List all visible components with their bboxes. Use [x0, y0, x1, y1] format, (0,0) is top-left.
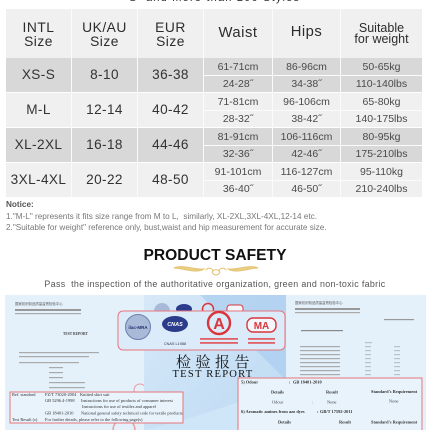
callout: certification logos: CNAS — [167, 322, 183, 328]
icon: gold ornament — [174, 266, 258, 276]
row XS-S — [22, 60, 407, 90]
row 3XL-4XL: 3XL-4XL — [11, 172, 66, 187]
row M-L: 65-80kg — [363, 96, 400, 108]
row XS-S: 8-10 — [90, 67, 119, 82]
left document page — [5, 295, 146, 430]
heading: product safety: PRODUCT SAFETY — [144, 247, 286, 264]
row XL-2XL: 16-18 — [86, 137, 123, 152]
header: Waist: Waist — [219, 24, 257, 40]
notice text: Notice: — [6, 200, 34, 209]
center document cover: TEST REPORT — [173, 369, 253, 380]
row 3XL-4XL — [11, 166, 408, 194]
right document page — [286, 295, 425, 430]
callout: odour and aromatic amines box: Result — [339, 420, 351, 424]
size chart table — [6, 9, 422, 197]
right document page: 国家纺织制品质量监督检验中心 — [295, 300, 343, 305]
row M-L: 40-42 — [152, 102, 189, 117]
callout: odour and aromatic amines box: None — [327, 400, 337, 404]
row 3XL-4XL: 20-22 — [86, 172, 123, 187]
callout: odour and aromatic amines box: Standard's Requirement — [371, 389, 418, 394]
row XL-2XL: 32-36˝ — [223, 148, 253, 160]
callout: odour and aromatic amines box: : — [312, 400, 313, 404]
row XL-2XL: 81-91cm — [218, 130, 258, 142]
row 3XL-4XL: 36-40˝ — [223, 182, 253, 194]
callout: certification logos: A — [213, 316, 225, 333]
callout: standards box: GB 5296.4-1998 — [45, 398, 75, 403]
row XS-S: 61-71cm — [218, 60, 258, 72]
callout: odour and aromatic amines box — [238, 378, 422, 430]
callout: certification logos: MA — [254, 321, 269, 332]
callout: odour and aromatic amines box: : — [317, 409, 319, 414]
notice text — [6, 200, 327, 232]
row M-L: 38-42˝ — [291, 112, 322, 124]
row 3XL-4XL: 210-240lbs — [356, 182, 407, 194]
callout: standards box — [10, 392, 183, 423]
callout: odour and aromatic amines box: Details — [271, 390, 284, 394]
row XL-2XL: 44-46 — [152, 137, 189, 152]
row M-L — [26, 96, 408, 124]
callout: certification logos — [118, 311, 285, 350]
row M-L: 71-81cm — [218, 96, 258, 108]
row XL-2XL: 106-116cm — [281, 130, 332, 142]
callout: odour and aromatic amines box: 5) Odour — [241, 380, 258, 384]
row XL-2XL: 42-46˝ — [291, 148, 322, 160]
callout: standards box: Instructions for use of products of consumer interest — [81, 398, 174, 403]
row XS-S: 50-65kg — [363, 60, 400, 72]
header: EUR Size: EUR — [155, 20, 186, 34]
callout: standards box: National general safety technical code for textile products — [81, 410, 183, 416]
row XS-S: XS-S — [22, 67, 55, 82]
row 3XL-4XL: 91-101cm — [215, 166, 261, 178]
callout: odour and aromatic amines box: Standard's Requirement — [371, 420, 418, 424]
row XL-2XL: XL-2XL — [15, 137, 62, 152]
callout: certification logos: CNAS L1988 — [164, 342, 186, 346]
callout: standards box: Knitted skirt suit — [80, 392, 110, 397]
notice text: 1."M-L" represents it fits size range from M to L, similarly, XL-2XL,3XL-4XL,12-14 etc. — [6, 212, 317, 220]
header: UK/AU Size: Size — [90, 34, 119, 48]
callout: standards box: FZ/T 73020-2004 — [45, 392, 77, 397]
callout: odour and aromatic amines box: Result — [326, 390, 338, 394]
header: EUR Size: Size — [156, 34, 185, 48]
row XS-S: 36-38 — [152, 67, 189, 82]
callout: standards box: For further details, please refer to the following page(s) — [45, 417, 143, 423]
center document cover — [144, 295, 286, 430]
row M-L: 28-32˝ — [223, 112, 253, 124]
header: UK/AU Size: UK/AU — [82, 20, 127, 34]
row 3XL-4XL: 46-50˝ — [291, 182, 322, 194]
callout: standards box: Instructions for use of textiles and apparel — [82, 404, 157, 409]
callout: odour and aromatic amines box: Odour — [272, 400, 284, 404]
callout: odour and aromatic amines box: None — [389, 398, 399, 404]
callout: standards box: Ref. standard — [12, 392, 36, 397]
row XL-2XL: 80-95kg — [363, 130, 400, 142]
left document page: TEST REPORT — [63, 332, 88, 336]
callout: standards box: Test Result (s) — [12, 417, 38, 422]
row XS-S: 86-96cm — [286, 60, 327, 72]
row 3XL-4XL: 116-127cm — [281, 166, 332, 178]
row M-L: 96-106cm — [283, 96, 330, 108]
callout: odour and aromatic amines box: : — [289, 380, 291, 384]
left document page: 国家纺织制品质量监督检验中心 — [15, 301, 63, 306]
callout: odour and aromatic amines box: GB 18401-2010 — [293, 380, 322, 384]
row XL-2XL: 175-210lbs — [356, 148, 407, 160]
subtitle: Pass the inspection of the authoritative organization, green and non-toxic fabric — [44, 279, 386, 289]
header: INTL Size: Size — [24, 34, 53, 48]
row XL-2XL — [15, 130, 408, 160]
row XS-S: 34-38˝ — [291, 78, 322, 90]
callout: odour and aromatic amines box: Details — [278, 420, 291, 424]
callout: certification logos: ilac-MRA — [128, 325, 148, 330]
photo: test report documents — [5, 295, 426, 430]
callout: odour and aromatic amines box: GB/T 17592-2011 — [320, 409, 352, 414]
callout: odour and aromatic amines box: 6) Aromatic amines from azo dyes — [241, 409, 305, 414]
row M-L: M-L — [26, 102, 51, 117]
header: Suitable for weight: Suitable — [359, 20, 404, 34]
row 3XL-4XL: 48-50 — [152, 172, 189, 187]
row XS-S: 24-28˝ — [223, 78, 253, 90]
row M-L: 12-14 — [86, 102, 123, 117]
header: EUR Size — [155, 20, 186, 48]
header: INTL Size: INTL — [23, 20, 54, 34]
header: UK/AU Size — [82, 20, 127, 48]
center document cover: 检验报告 — [176, 351, 254, 372]
row 3XL-4XL: 95-110kg — [360, 166, 403, 178]
header: Suitable for weight: for weight — [354, 32, 409, 46]
notice text: 2."Suitable for weight" reference only, bust,waist and hip measurement for accurate size. — [6, 223, 327, 232]
header: INTL Size — [23, 20, 54, 48]
callout: standards box: GB 18401-2010 — [45, 410, 74, 416]
row M-L: 140-175lbs — [356, 112, 407, 124]
row XS-S: 110-140lbs — [356, 78, 407, 90]
header: Suitable for weight — [354, 20, 409, 46]
header: Hips: Hips — [291, 24, 322, 40]
